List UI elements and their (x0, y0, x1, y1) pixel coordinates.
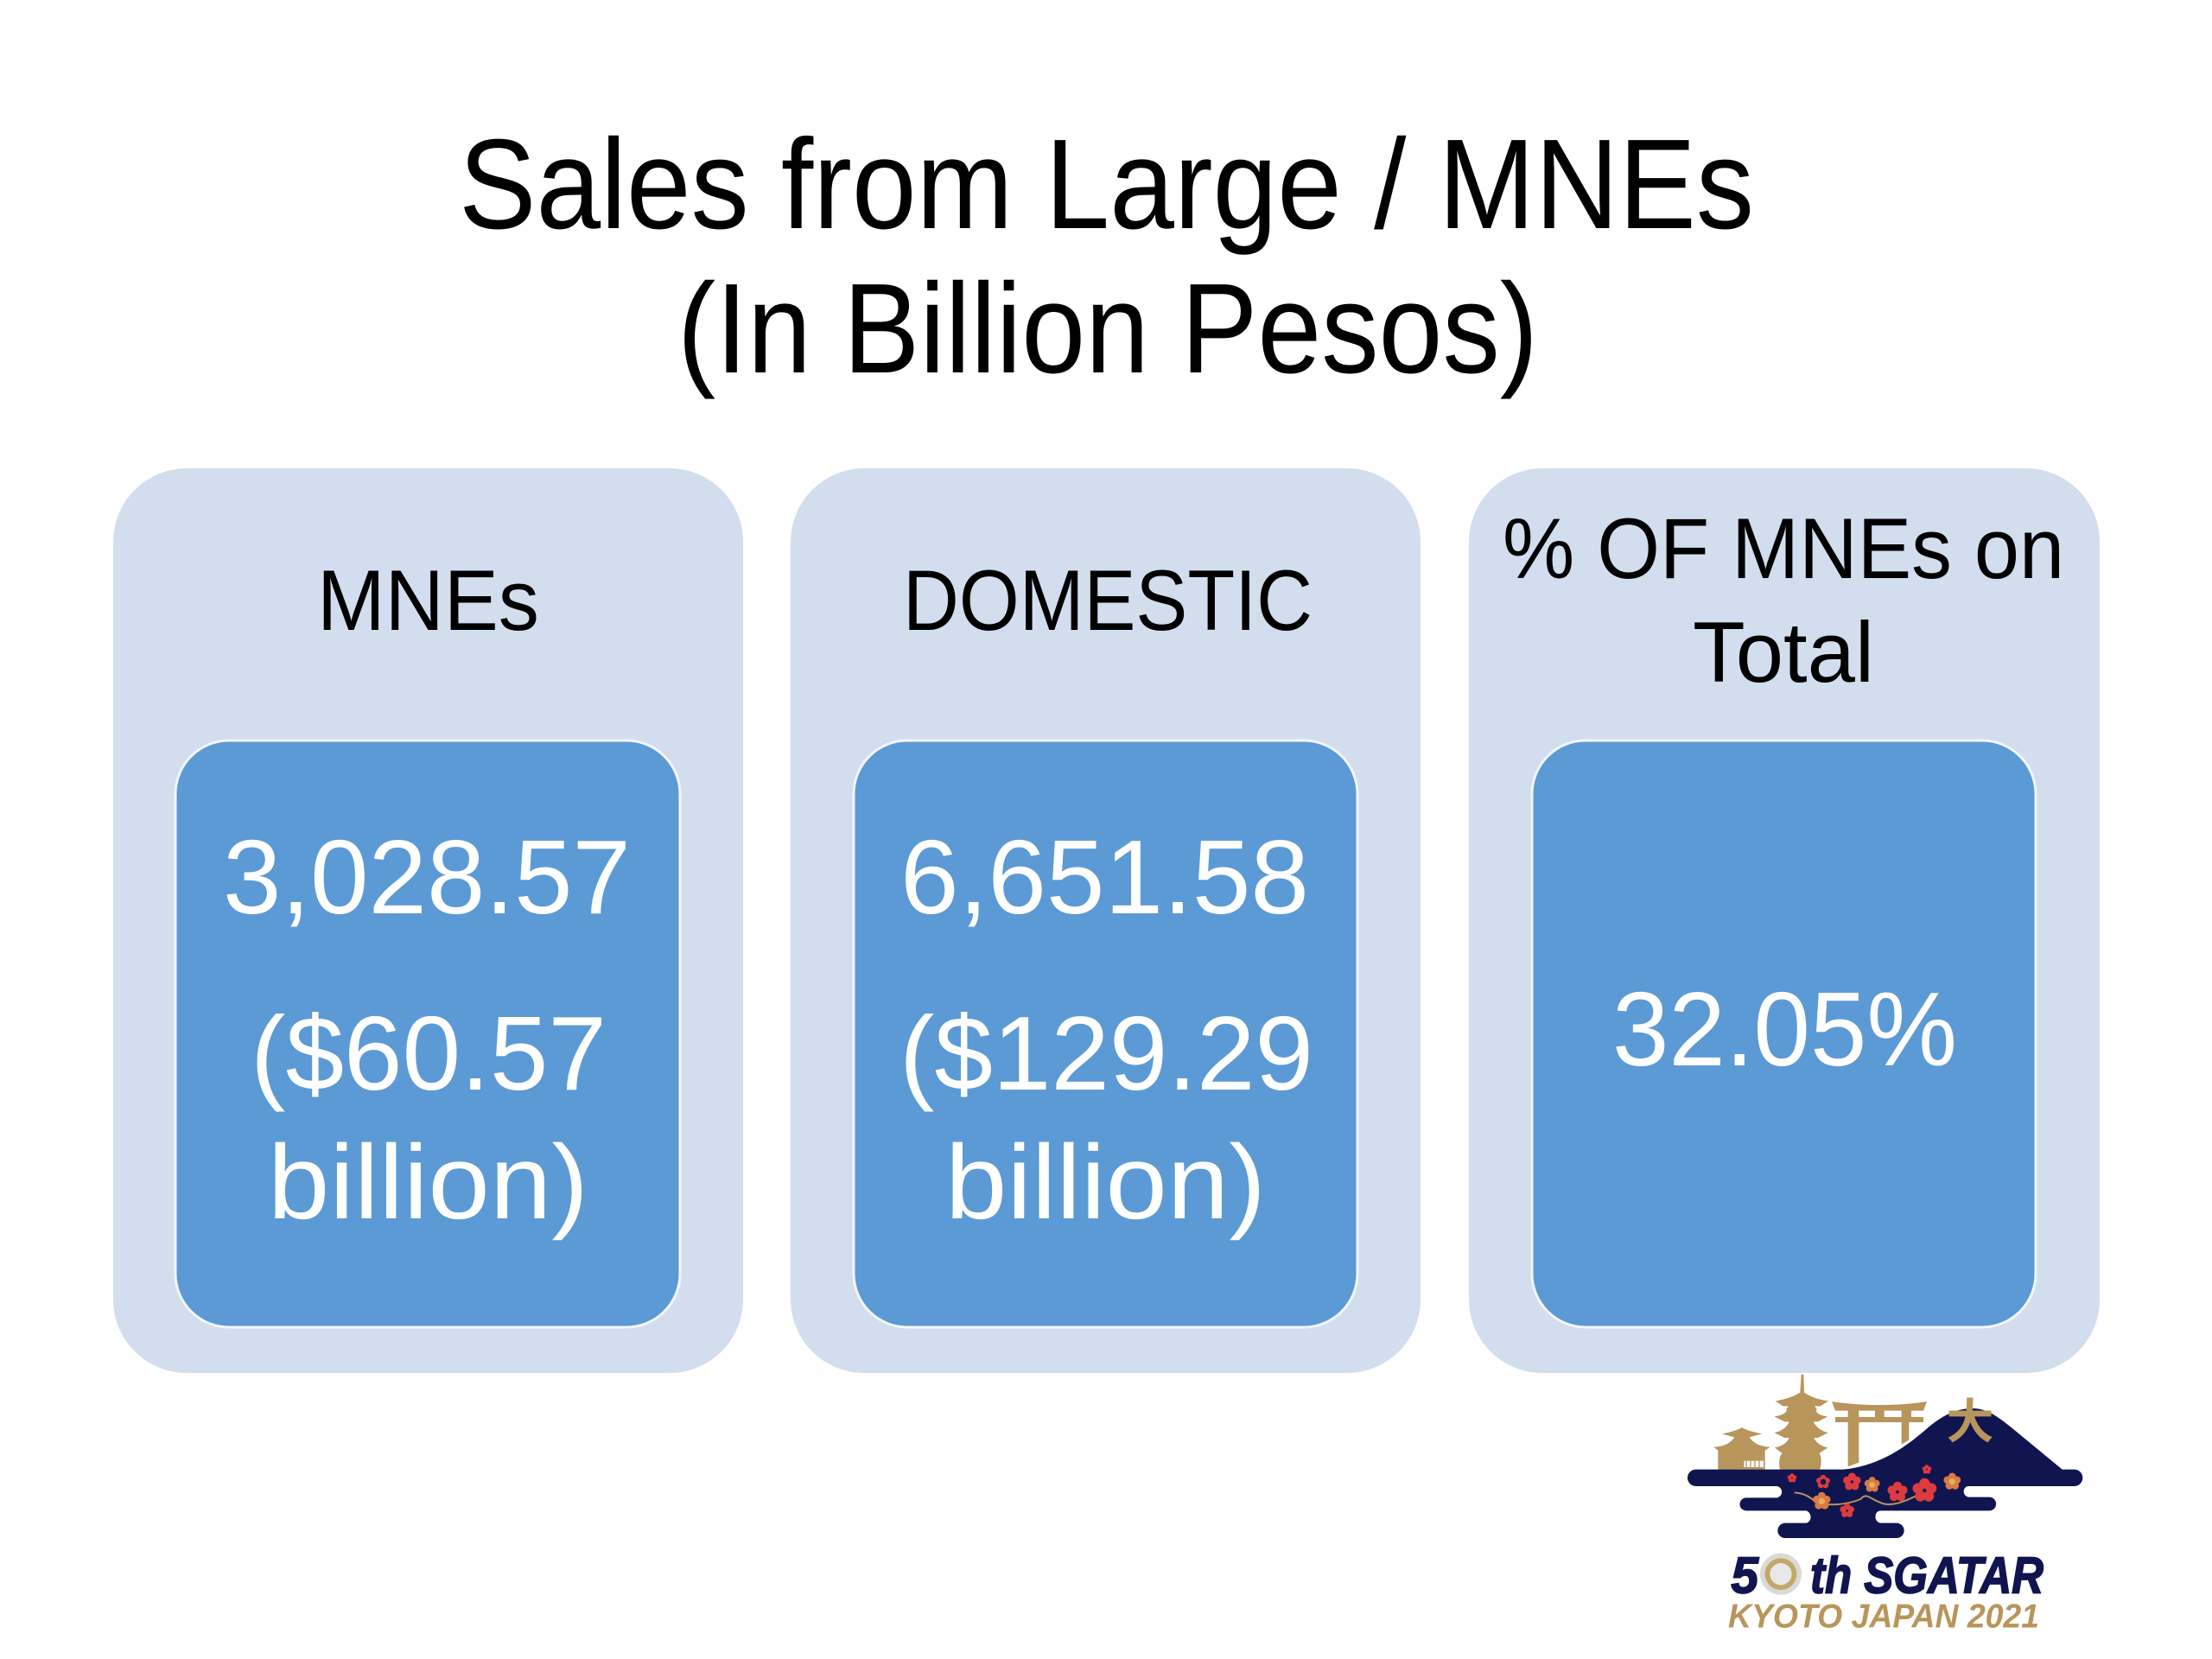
icon: kanji dai: 大 (1947, 1383, 1993, 1452)
logo text: Kyoto Japan 2021: KYOTO JAPAN 2021 (1728, 1598, 2039, 1635)
logo text: 50th SGATAR: th SGATAR (1810, 1546, 2044, 1604)
heading: percent of MNEs on total: % OF MNEs on (1503, 500, 2064, 596)
logo text: 50th SGATAR: 5 (1731, 1546, 1759, 1604)
heading: percent of MNEs on total (1503, 500, 2064, 700)
value box: MNEs: billion) (268, 1123, 588, 1241)
panel: Domestic (791, 468, 1421, 1373)
title: Sales from Large / MNEs (459, 113, 1754, 256)
heading: Domestic: DOMESTIC (903, 552, 1313, 648)
value box: percent (1532, 741, 2036, 1327)
panel: percent of MNEs on total (1469, 468, 2100, 1373)
value box: Domestic: 6,651.58 (900, 818, 1309, 936)
icon: gold torii gate (1832, 1402, 1927, 1466)
heading: MNEs: MNEs (317, 552, 539, 648)
value box: MNEs: ($60.57 (251, 995, 607, 1112)
icon: gold temple (1713, 1427, 1770, 1470)
value box: percent: 32.05% (1612, 970, 1957, 1088)
icon: plum blossom branch (1788, 1465, 1961, 1517)
value box: MNEs (175, 741, 680, 1327)
logo: 50th SGATAR Kyoto Japan 2021 (1688, 1375, 2082, 1635)
panel: MNEs (113, 468, 743, 1373)
logo text: 50th SGATAR (1731, 1546, 2044, 1604)
value box: Domestic (854, 741, 1357, 1327)
heading: percent of MNEs on total: Total (1693, 604, 1874, 700)
title (459, 113, 1754, 400)
value box: MNEs: 3,028.57 (223, 818, 631, 936)
value box: Domestic: billion) (945, 1123, 1266, 1241)
title: (In Billion Pesos) (677, 257, 1538, 400)
icon: navy mountain and clouds (1688, 1408, 2082, 1538)
icon: gold pagoda (1774, 1375, 1828, 1470)
value box: Domestic: ($129.29 (899, 995, 1313, 1112)
